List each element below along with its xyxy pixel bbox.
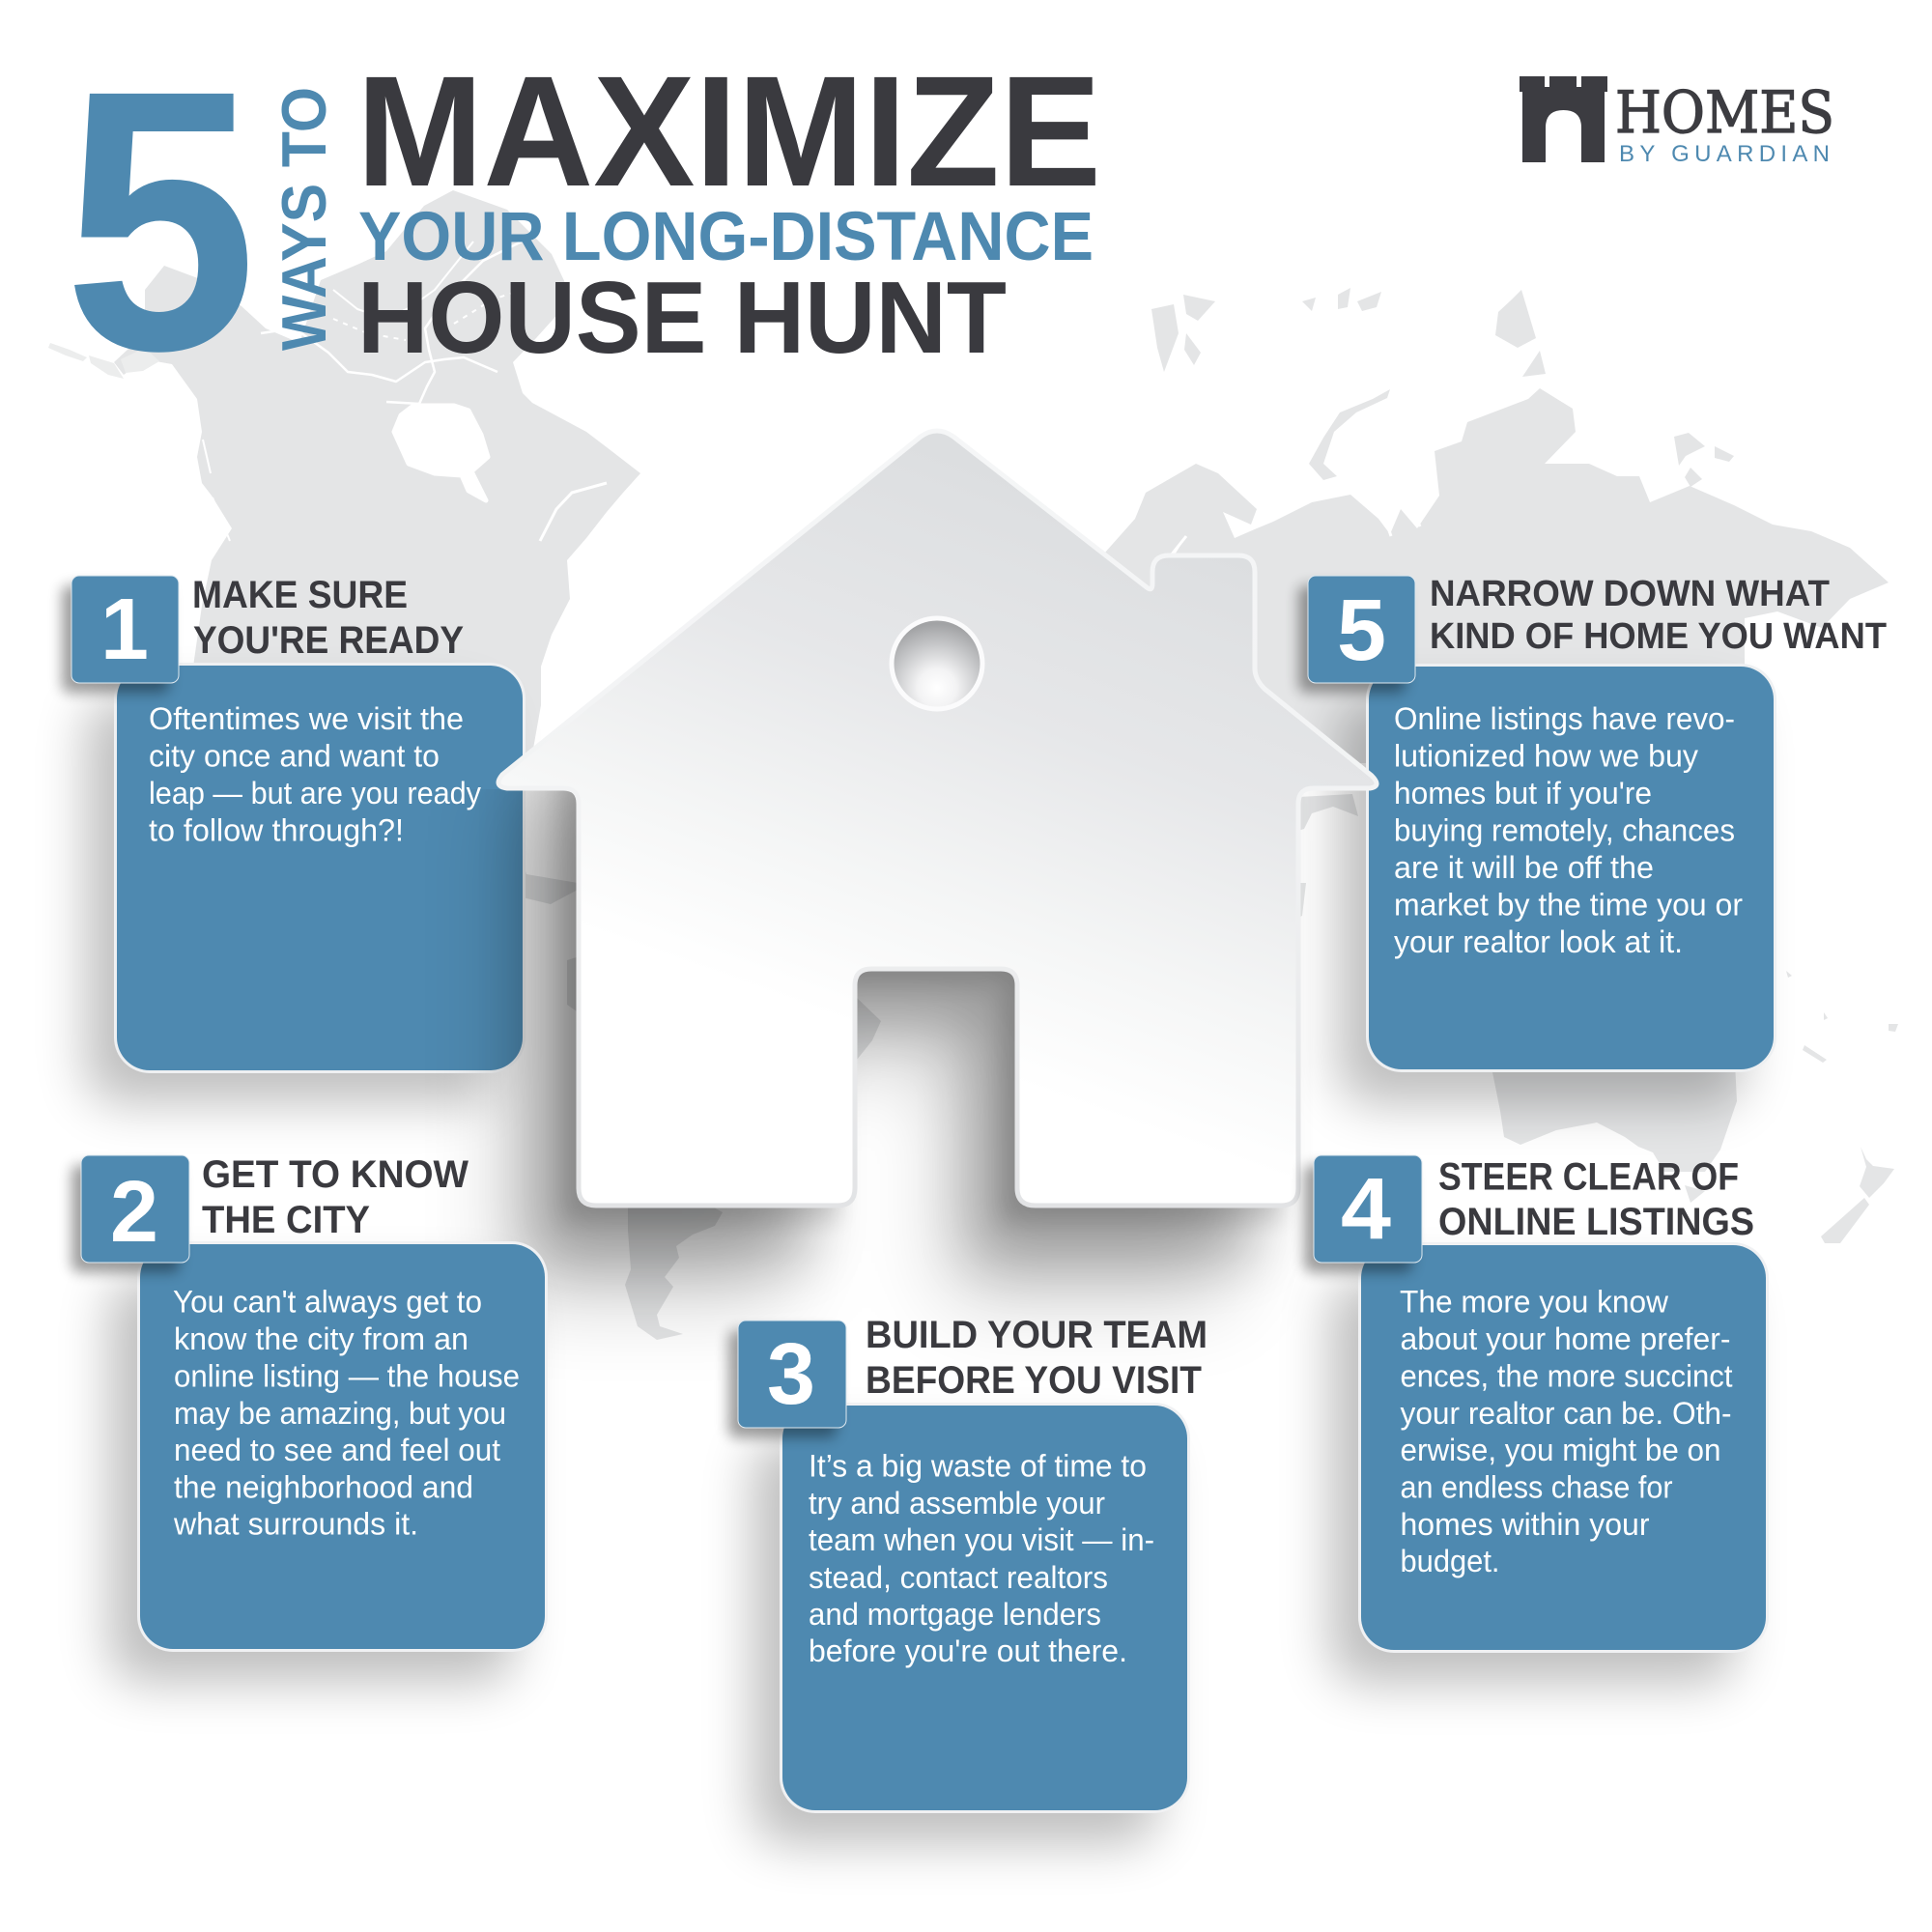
step 5 text: your realtor look at it. (1394, 924, 1683, 959)
map: eurasia (1104, 388, 1889, 763)
map: africa fragments (567, 794, 1358, 1013)
step 4 text: The more you know (1400, 1285, 1669, 1320)
step 1 content (62, 574, 481, 848)
map: north america (114, 190, 640, 904)
world map (48, 190, 1898, 1340)
step 3 text: try and assemble your (809, 1486, 1105, 1520)
step 2 text (173, 1285, 520, 1542)
panel 3 card (780, 1403, 1190, 1813)
step 5 heading (1430, 574, 1887, 657)
map: tasmania (1685, 1185, 1705, 1203)
map: brazil in doorway (850, 995, 881, 1063)
step 5 text: homes but if you're (1394, 776, 1652, 810)
house body (498, 431, 1377, 1206)
panel 4 shadow (1330, 1278, 1736, 1684)
step 5 text: lutionized how we buy (1394, 738, 1698, 773)
step 4 badge (1304, 1155, 1422, 1272)
panel 1 card (114, 663, 526, 1073)
step 4 text: about your home prefer- (1401, 1321, 1731, 1356)
logo tagline: BY GUARDIAN (1619, 141, 1830, 167)
step 5 heading: NARROW DOWN WHAT (1430, 574, 1830, 614)
step 2 text: You can't always get to (173, 1285, 482, 1320)
step 2 heading: THE CITY (202, 1199, 370, 1241)
step 3 text: team when you visit — in- (809, 1522, 1154, 1557)
step 1 text (149, 701, 481, 848)
panel 4: steer clear of online listings (1304, 1155, 1769, 1684)
step 4 text: budget. (1401, 1544, 1499, 1578)
map: severnaya zemlya (1495, 290, 1546, 377)
step 3 text: before you're out there. (809, 1634, 1127, 1668)
step 2 text: need to see and feel out (174, 1433, 500, 1467)
big numeral five: 5 (64, 14, 257, 428)
map: aleutian islands (48, 343, 159, 379)
step 1 text: leap — but are you ready (149, 776, 481, 810)
map: franz josef land (1302, 288, 1381, 311)
step 5 text: are it will be off the (1394, 850, 1654, 885)
ways to, rotated: WAYS TO (269, 87, 339, 351)
step 5 text: buying remotely, chances (1394, 813, 1735, 848)
step 1 badge: 1 (100, 582, 149, 678)
your long-distance: YOUR LONG-DISTANCE (358, 199, 1094, 275)
step 4 text: an endless chase for (1401, 1469, 1673, 1504)
panel 2 shadow (109, 1277, 515, 1683)
step 2 heading: GET TO KNOW (202, 1153, 469, 1196)
step 4 text: erwise, you might be on (1401, 1433, 1721, 1467)
step 4 text (1400, 1285, 1733, 1578)
step 2 text: know the city from an (174, 1321, 469, 1356)
step 2 text: may be amazing, but you (174, 1396, 506, 1431)
step 1 text: city once and want to (149, 738, 440, 773)
step 4 text: ences, the more succinct (1401, 1358, 1733, 1393)
step 1 text: Oftentimes we visit the (149, 701, 464, 736)
step 3 heading: BUILD YOUR TEAM (866, 1314, 1208, 1356)
map: pacific islands (1786, 971, 1898, 1063)
map: russian inlets (1159, 454, 1773, 676)
house shadow (509, 711, 1283, 1297)
step 3 heading (866, 1314, 1208, 1402)
step 4 heading (1438, 1156, 1754, 1243)
panel 1 shadow (86, 697, 492, 1103)
step 1 heading: MAKE SURE (192, 574, 408, 616)
step 5 badge: 5 (1337, 582, 1386, 679)
step 3 text: and mortgage lenders (809, 1597, 1101, 1632)
panel 5 shadow (1338, 698, 1744, 1104)
panel 5 card (1366, 664, 1776, 1072)
maximize: MAXIMIZE (356, 43, 1101, 219)
map: south america (625, 1159, 723, 1340)
panel 1: make sure you're ready (86, 663, 526, 1103)
step 2 badge: 2 (110, 1164, 158, 1261)
step 4 text: your realtor can be. Oth- (1401, 1396, 1731, 1431)
logo: homes by guardian (1520, 76, 1834, 167)
step 5 content (1298, 574, 1887, 959)
map: new zealand (1821, 1198, 1869, 1243)
step 3 text: stead, contact realtors (809, 1560, 1108, 1595)
step 5 text: Online listings have revo- (1394, 701, 1735, 736)
map: hudson bay and channels (203, 242, 607, 541)
step 4 badge: 4 (1341, 1161, 1391, 1258)
map: new siberian islands (1674, 433, 1734, 487)
step 3 badge: 3 (767, 1326, 815, 1423)
house hunt: HOUSE HUNT (357, 261, 1007, 375)
step 3 text (809, 1449, 1154, 1668)
panel 3 shadow (753, 1438, 1158, 1844)
map: australia (1491, 1063, 1737, 1172)
step 1 heading (192, 574, 464, 662)
central house (498, 431, 1377, 1297)
map: svalbard (1151, 295, 1215, 372)
map: novaya zemlya (1309, 389, 1390, 480)
main title (64, 14, 1101, 428)
step 2 heading (202, 1153, 469, 1241)
step 2 badge (71, 1155, 189, 1272)
step 4 heading: ONLINE LISTINGS (1438, 1201, 1754, 1243)
step 1 badge (62, 576, 179, 693)
house round window (892, 618, 982, 709)
step 3 badge (728, 1321, 846, 1437)
step 3 text: It’s a big waste of time to (809, 1449, 1147, 1484)
step 1 heading: YOU'RE READY (193, 619, 464, 662)
step 3 heading: BEFORE YOU VISIT (866, 1359, 1202, 1402)
panel 5: narrow down what kind of home (1338, 664, 1776, 1104)
icon: castle tower (1520, 76, 1607, 162)
panel 2 card (137, 1241, 548, 1652)
logo wordmark: HOMES (1615, 79, 1834, 147)
step 5 text: market by the time you or (1394, 887, 1743, 922)
panel 4 card (1358, 1242, 1769, 1653)
step 2 text: online listing — the house (174, 1358, 520, 1393)
step 2 text: what surrounds it. (173, 1507, 418, 1542)
step 5 text (1394, 701, 1743, 959)
step 5 badge (1298, 576, 1415, 693)
step 4 heading: STEER CLEAR OF (1438, 1156, 1739, 1199)
step 4 text: homes within your (1401, 1507, 1650, 1542)
step 1 text: to follow through?! (149, 813, 404, 848)
step 2 text: the neighborhood and (174, 1469, 473, 1504)
step 5 heading: KIND OF HOME YOU WANT (1430, 616, 1887, 657)
panel 2: get to know the city (71, 1153, 548, 1683)
panel 3: build your team (728, 1314, 1208, 1844)
